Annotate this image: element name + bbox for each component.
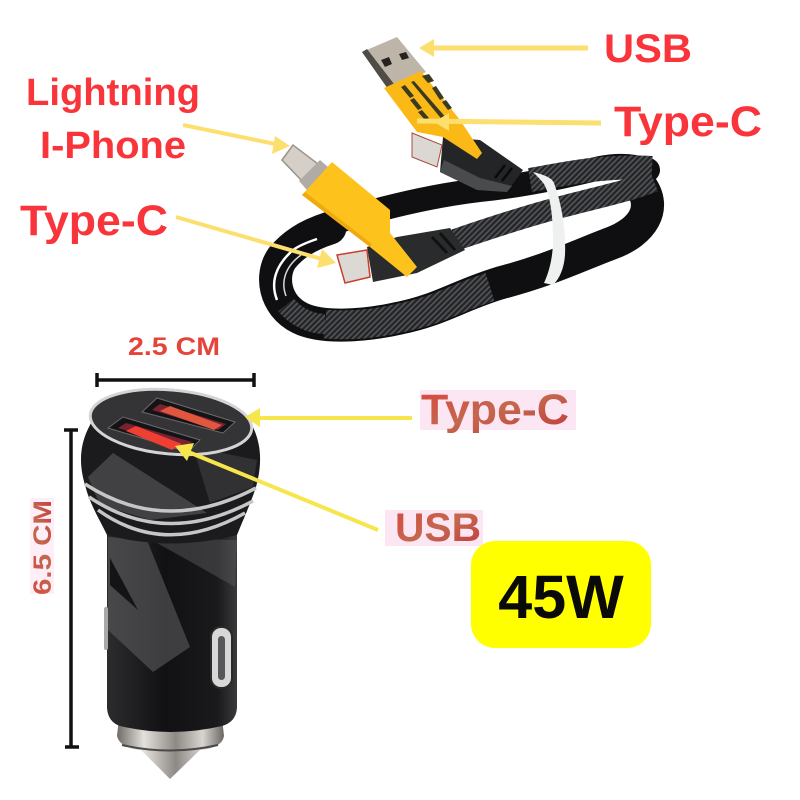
label: USB: USB (604, 27, 692, 71)
label: I-Phone: I-Phone (40, 125, 186, 167)
braided cable (274, 166, 654, 325)
charger metal tip (117, 718, 224, 779)
Lightning tip (282, 145, 318, 182)
charger watermark shapes (108, 537, 190, 672)
label: Lightning: Lightning (26, 72, 200, 114)
car charger (81, 383, 260, 779)
charger lower body (107, 530, 237, 732)
upper black Type-C housing (440, 137, 523, 192)
label: 6.5 CM: 6.5 CM (29, 500, 57, 595)
arrow: Lightning (183, 125, 290, 154)
charger head (81, 390, 260, 544)
USB metal plug (362, 37, 426, 89)
cable wrap band (533, 172, 565, 285)
badge: 45W (471, 541, 651, 648)
USB plug and top connectors (362, 37, 523, 192)
arrow: USB cable (419, 39, 588, 57)
label: Type-C left: Type-C (20, 197, 168, 245)
Lightning and lower Type-C connector (282, 145, 465, 283)
height dimension line (64, 430, 79, 747)
label: charger Type-C: Type-C (421, 386, 569, 434)
lower Type-C metal (337, 250, 370, 283)
label: charger USB: USB (395, 506, 481, 550)
label: Type-C upper: Type-C (614, 98, 762, 146)
USB yellow housing (384, 71, 482, 159)
arrow: charger USB (175, 443, 378, 530)
lower black housing (367, 228, 465, 282)
arrow: upper Type-C (417, 113, 601, 131)
arrow: left Type-C (176, 217, 336, 268)
port: front (108, 417, 200, 452)
charger top face (88, 383, 254, 461)
arrow: charger Type-C (245, 408, 412, 427)
charger side button (211, 627, 232, 688)
label: 2.5 CM: 2.5 CM (128, 333, 220, 361)
lower yellow housing (302, 162, 417, 277)
upper Type-C metal (412, 133, 442, 167)
charger rings (85, 484, 256, 535)
badge: 45W: 45W (498, 563, 624, 631)
port: rear (142, 398, 235, 433)
width dimension line (97, 373, 254, 387)
charger side nub (104, 607, 108, 650)
